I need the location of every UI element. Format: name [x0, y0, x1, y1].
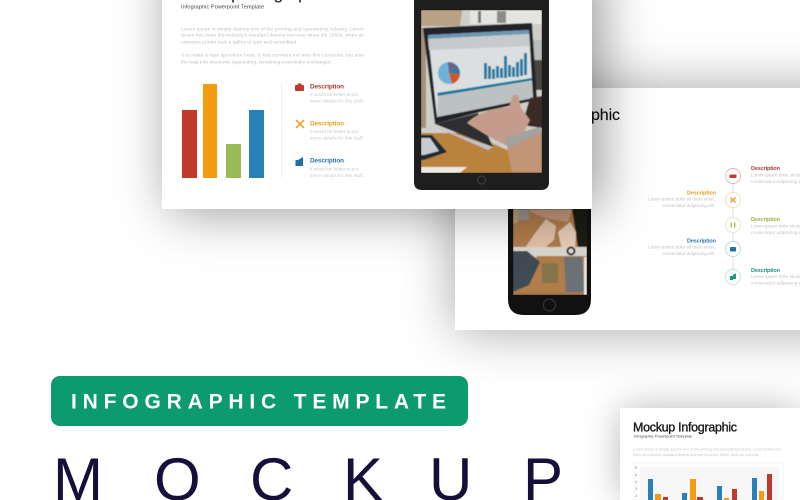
- column chart: 3: [635, 487, 637, 491]
- panel: slide bar chart and tablet: [162, 0, 592, 209]
- body text: Lorem Ipsum is simply dummy text of the printing and typesetting industry. Lorem: [181, 26, 364, 32]
- badge: infographic template: [51, 376, 468, 426]
- phone mockup: [508, 209, 591, 315]
- description: orange: Description: [310, 120, 344, 128]
- description: blue: It would be better to put: [310, 166, 359, 172]
- body text: unknown printer took a galley of type and scrambled: [181, 40, 296, 44]
- description: red: It would be better to put: [310, 92, 359, 98]
- panel: slide column chart: [620, 408, 800, 500]
- description: red: Description: [310, 84, 344, 90]
- timeline connector: [732, 176, 734, 277]
- timeline step: red: [726, 166, 800, 185]
- description: orange: It would be better to put: [310, 129, 359, 135]
- column chart: 2: [635, 494, 637, 498]
- description: red: [295, 84, 364, 104]
- slide subtitle: Infographic Powerpoint Template: [634, 434, 693, 438]
- description: orange: [296, 120, 364, 142]
- column chart: 6: [635, 473, 637, 477]
- column chart: 8: [635, 466, 637, 470]
- timeline step: red: Description: [751, 166, 781, 172]
- panel: slide timeline: [455, 88, 800, 330]
- keyboard: [435, 113, 493, 147]
- slide title: Mockup Infographic: [633, 421, 737, 435]
- slide heading: phic: [591, 107, 620, 124]
- timeline step: blue: Description: [687, 238, 717, 244]
- hand: [467, 95, 530, 146]
- timeline step: teal: [726, 268, 800, 286]
- timeline step: blue: consectetur adipiscing elit.: [662, 251, 715, 257]
- bars: [484, 53, 527, 79]
- body text: the leap into electronic typesetting, remaining essentially unchanged.: [181, 60, 332, 64]
- tablet mockup: [414, 0, 549, 190]
- timeline step: orange: consectetur adipiscing elit.: [662, 203, 715, 209]
- timeline step: blue: [648, 238, 740, 257]
- description: blue: [296, 157, 364, 179]
- timeline step: orange: Lorem ipsum dolor sit dudu amet,: [648, 196, 715, 202]
- body text: Ipsum has been the industry's standard dummy text ever since the 1500s, when an: [181, 32, 364, 38]
- subtitle: Infographic Powerpoint Template: [181, 4, 264, 10]
- description: red: some details for this stuff.: [310, 98, 364, 104]
- timeline step: orange: [648, 190, 740, 209]
- timeline step: blue: Lorem ipsum dolor sit dudu amet,: [648, 244, 715, 250]
- phone on desk: [421, 135, 447, 160]
- bar chart: [182, 84, 264, 178]
- badge: infographic template: INFOGRAPHIC TEMPLATE: [71, 390, 446, 414]
- column chart: 4: [635, 480, 637, 484]
- description: orange: some details for this stuff.: [310, 136, 364, 142]
- slide body text: Lorem Ipsum is simply dummy text of the printing and typesetting industry. Lorem Ipsum has: [633, 448, 781, 452]
- description: blue: some details for this stuff.: [310, 173, 364, 179]
- body text: [181, 26, 364, 64]
- timeline step: orange: Description: [687, 190, 717, 196]
- column chart: [634, 463, 783, 500]
- timeline step: teal: Description: [751, 268, 781, 274]
- panel: slide column chart: been the industry's standard dummy text ever since the 1500s, when an unknown: [633, 453, 759, 457]
- body text: It to make a type specimen book. It has survived not only five centuries, but also: [181, 52, 364, 58]
- timeline step: green: [726, 217, 800, 236]
- laptop: [423, 23, 537, 124]
- description: blue: Description: [310, 158, 344, 164]
- table: [421, 133, 542, 173]
- pie: [438, 62, 460, 84]
- timeline step: green: Description: [751, 217, 781, 223]
